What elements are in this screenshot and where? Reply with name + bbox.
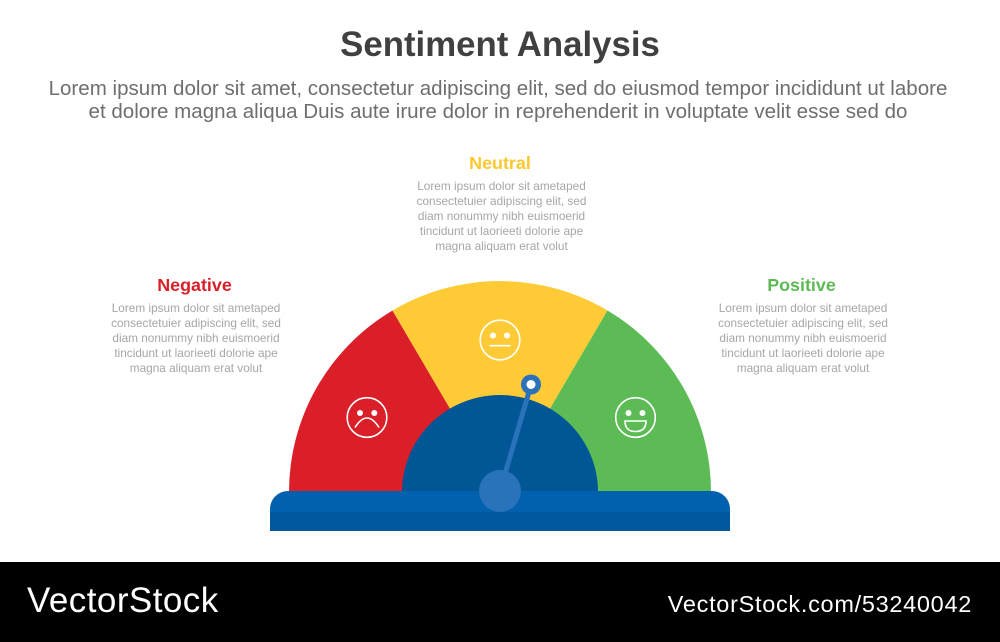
text block: negative bbox=[111, 301, 281, 375]
text block: neutral bbox=[417, 179, 586, 253]
text block: positive: diam nonummy nibh euismoerid bbox=[719, 331, 887, 345]
icon: neutral face bbox=[480, 320, 520, 360]
gauge segment: neutral bbox=[392, 281, 608, 412]
gauge segment: negative bbox=[289, 310, 452, 492]
text block: negative: magna aliquam erat volut bbox=[130, 361, 262, 375]
icon: sad face bbox=[347, 398, 387, 437]
panel: positive text bbox=[718, 275, 888, 375]
footer bar bbox=[0, 562, 1000, 642]
footer url: VectorStock.com/53240042 bbox=[668, 591, 972, 617]
text block: positive bbox=[718, 301, 888, 375]
subtitle text: et dolore magna aliqua Duis aute irure dolor in reprehenderit in voluptate velit esse sed do bbox=[89, 100, 907, 122]
heading: positive: Positive bbox=[767, 275, 836, 295]
text block: negative: consectetuier adipiscing elit, sed bbox=[111, 316, 281, 330]
subtitle text bbox=[49, 77, 947, 122]
heading: neutral: Neutral bbox=[469, 153, 531, 173]
title: Sentiment Analysis bbox=[340, 24, 660, 64]
gauge segment: positive bbox=[548, 310, 711, 492]
text block: neutral: Lorem ipsum dolor sit ametaped bbox=[417, 179, 586, 193]
heading: negative: Negative bbox=[157, 275, 232, 295]
text block: positive: tincidunt ut laorieeti dolorie ape bbox=[721, 346, 885, 360]
text block: negative: Lorem ipsum dolor sit ametaped bbox=[112, 301, 280, 315]
gauge base bbox=[270, 491, 730, 531]
text block: negative: diam nonummy nibh euismoerid bbox=[112, 331, 280, 345]
text block: positive: consectetuier adipiscing elit, sed bbox=[718, 316, 888, 330]
text block: positive: magna aliquam erat volut bbox=[737, 361, 869, 375]
text block: neutral: magna aliquam erat volut bbox=[435, 239, 568, 253]
text block: neutral: consectetuier adipiscing elit, sed bbox=[417, 194, 586, 208]
icon: happy face bbox=[616, 398, 655, 437]
needle bbox=[479, 374, 541, 512]
gauge inner dome bbox=[402, 395, 598, 492]
panel: negative text bbox=[111, 275, 281, 375]
text block: neutral: diam nonummy nibh euismoerid bbox=[418, 209, 585, 223]
subtitle text: Lorem ipsum dolor sit amet, consectetur adipiscing elit, sed do eiusmod tempor incididunt ut labore bbox=[49, 77, 947, 100]
text block: neutral: tincidunt ut laorieeti dolorie ape bbox=[420, 224, 583, 238]
text block: positive: Lorem ipsum dolor sit ametaped bbox=[719, 301, 887, 315]
text block: negative: tincidunt ut laorieeti dolorie ape bbox=[114, 346, 278, 360]
panel: neutral text bbox=[417, 153, 586, 253]
footer logo: VectorStock bbox=[27, 581, 219, 620]
